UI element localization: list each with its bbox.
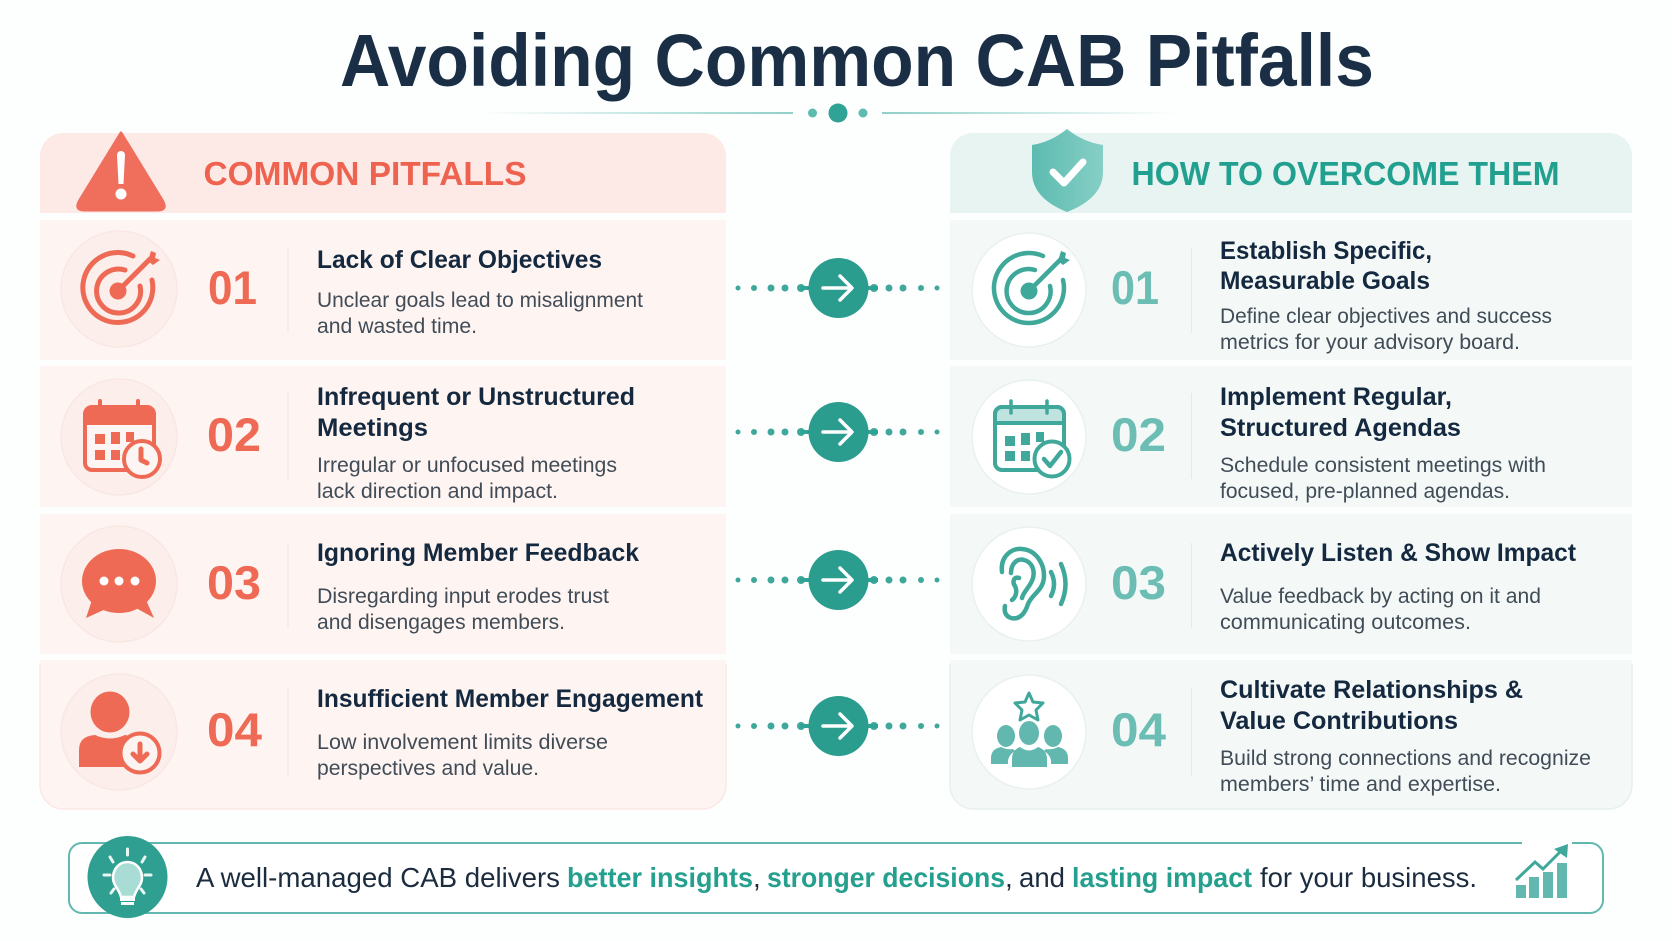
text: lack of clear objectives: and wasted time. (317, 315, 477, 338)
number 03: 03 (1111, 556, 1166, 609)
text: establish specific, measurable goals: Measurable Goals (1220, 267, 1430, 295)
text: cultivate relationships and value contributions: Cultivate Relationships & (1220, 676, 1523, 704)
text: lack of clear objectives: Lack of Clear Objectives (317, 246, 602, 274)
connector arrows (736, 258, 940, 756)
text: insufficient member engagement: Low involvement limits diverse (317, 731, 608, 754)
text: implement regular, structured agendas: Schedule consistent meetings with (1220, 454, 1546, 477)
arrow 3 (736, 550, 940, 610)
banner text: lasting impact (1072, 862, 1252, 893)
icon: target (61, 231, 177, 347)
text: insufficient member engagement: Insufficient Member Engagement (317, 685, 704, 713)
icon: person with down arrow (61, 674, 177, 790)
banner text: A well-managed CAB delivers (196, 862, 560, 893)
banner text: , (753, 862, 761, 893)
banner text: better insights (567, 862, 753, 893)
text: actively listen and show impact: Value feedback by acting on it and (1220, 585, 1541, 608)
banner text: , (1005, 862, 1013, 893)
text: actively listen and show impact: communicating outcomes. (1220, 611, 1471, 634)
row 3: actively listen and show impact (950, 514, 1632, 654)
arrow 4 (736, 696, 940, 756)
number 01: 01 (208, 261, 257, 314)
panel header: how to overcome them (950, 129, 1632, 213)
text: establish specific, measurable goals: metrics for your advisory board. (1220, 331, 1520, 354)
text: actively listen and show impact: Actively Listen & Show Impact (1220, 539, 1577, 567)
icon: warning triangle (78, 133, 164, 210)
title divider (482, 104, 1178, 122)
text: lack of clear objectives (317, 246, 643, 338)
text: cultivate relationships and value contributions (1220, 676, 1591, 796)
bottom banner (69, 836, 1603, 918)
number 04: 04 (207, 703, 262, 756)
panel: common pitfalls (40, 133, 726, 809)
text: cultivate relationships and value contributions: Value Contributions (1220, 707, 1458, 735)
text: establish specific, measurable goals: Establish Specific, (1220, 237, 1432, 265)
text: actively listen and show impact (1220, 539, 1577, 634)
icon: target (972, 233, 1086, 347)
banner text: for your business. (1260, 862, 1477, 893)
text: infrequent or unstructured meetings: lack direction and impact. (317, 480, 558, 503)
icon: calendar with check (972, 380, 1086, 494)
number 02: 02 (1111, 408, 1166, 461)
arrow 1 (736, 258, 940, 318)
row 4: insufficient member engagement (40, 660, 726, 809)
text: ignoring member feedback: and disengages members. (317, 611, 565, 634)
icon: speech bubble (61, 526, 177, 642)
banner text: and (1019, 862, 1065, 893)
row 1: lack of clear objectives (40, 220, 726, 360)
panel header: common pitfalls (40, 133, 726, 213)
text: ignoring member feedback (317, 539, 639, 634)
number 03: 03 (207, 556, 261, 609)
row 1: establish specific, measurable goals (950, 220, 1632, 360)
title: Avoiding Common CAB Pitfalls (340, 19, 1374, 102)
text: infrequent or unstructured meetings (317, 383, 635, 503)
number 01: 01 (1111, 261, 1159, 314)
panel: how to overcome them (950, 129, 1632, 809)
icon: growth chart (1516, 841, 1572, 898)
text: cultivate relationships and value contributions: members’ time and expertise. (1220, 773, 1501, 796)
row 2: infrequent or unstructured meetings (40, 366, 726, 507)
text: infrequent or unstructured meetings: Meetings (317, 414, 428, 442)
row 3: ignoring member feedback (40, 514, 726, 654)
row 4: cultivate relationships and value contributions (950, 660, 1632, 809)
banner text: stronger decisions (767, 862, 1005, 893)
text: implement regular, structured agendas (1220, 383, 1546, 503)
arrow 2 (736, 402, 940, 462)
icon: shield with check (1032, 129, 1103, 212)
number 04: 04 (1111, 703, 1166, 756)
icon: team with star (972, 675, 1086, 789)
text: implement regular, structured agendas: Structured Agendas (1220, 414, 1461, 442)
number 02: 02 (207, 408, 261, 461)
text: cultivate relationships and value contributions: Build strong connections and recognize (1220, 747, 1591, 770)
heading: common pitfalls: COMMON PITFALLS (204, 155, 526, 192)
text: implement regular, structured agendas: Implement Regular, (1220, 383, 1452, 411)
text: establish specific, measurable goals: Define clear objectives and success (1220, 305, 1552, 328)
text: establish specific, measurable goals (1220, 237, 1552, 354)
text: insufficient member engagement (317, 685, 704, 780)
text: ignoring member feedback: Ignoring Member Feedback (317, 539, 639, 567)
text: ignoring member feedback: Disregarding input erodes trust (317, 585, 609, 608)
banner text (196, 862, 1477, 893)
text: infrequent or unstructured meetings: Infrequent or Unstructured (317, 383, 635, 411)
icon: ear with sound waves (972, 527, 1086, 641)
row 2: implement regular, structured agendas (950, 366, 1632, 507)
icon: light bulb (88, 836, 168, 918)
text: insufficient member engagement: perspectives and value. (317, 757, 539, 780)
text: implement regular, structured agendas: focused, pre-planned agendas. (1220, 480, 1510, 503)
icon: calendar with clock (61, 379, 177, 495)
text: infrequent or unstructured meetings: Irregular or unfocused meetings (317, 454, 617, 477)
heading: how to overcome them: HOW TO OVERCOME THEM (1132, 155, 1560, 192)
text: lack of clear objectives: Unclear goals lead to misalignment (317, 289, 643, 312)
